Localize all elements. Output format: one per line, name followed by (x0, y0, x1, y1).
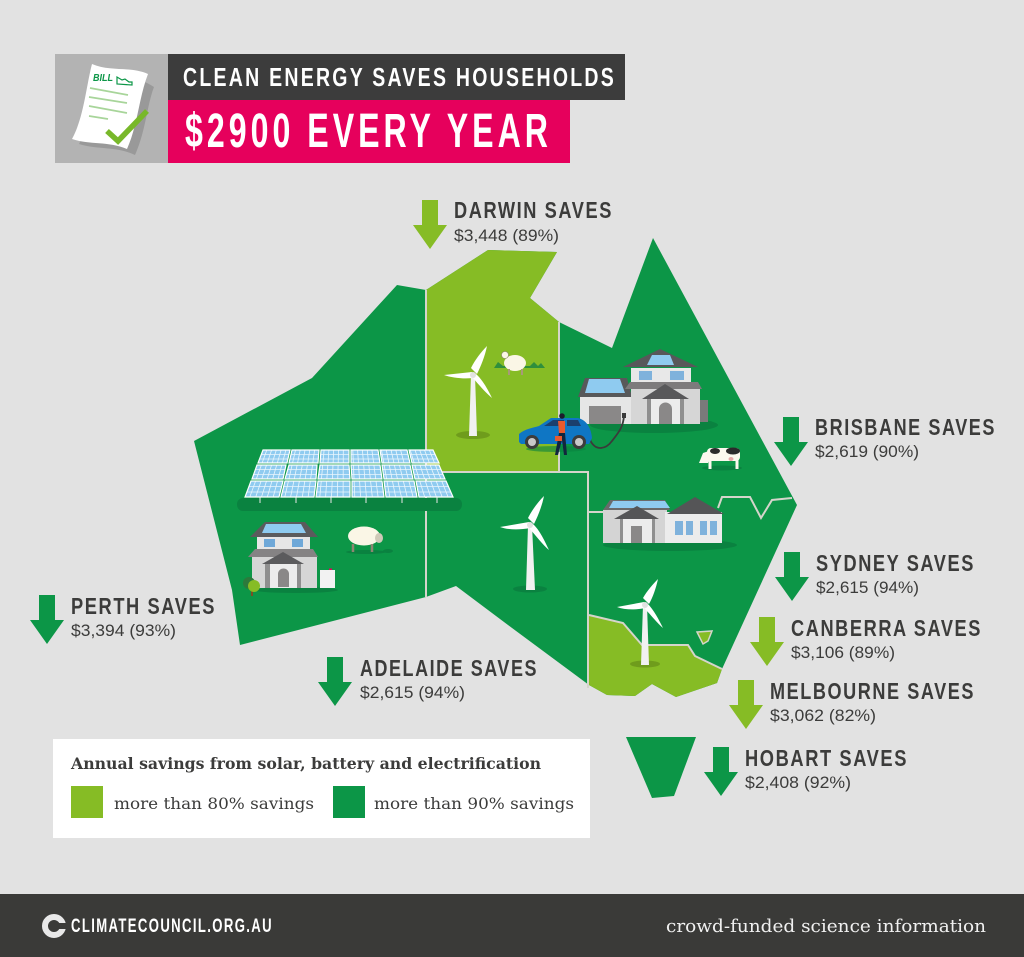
title banner (55, 54, 625, 163)
arrow (750, 617, 784, 666)
arrow (318, 657, 352, 706)
wind turbine: Victoria (617, 579, 663, 668)
city: Sydney (775, 550, 975, 601)
city: Canberra: $3,106 (89%) (791, 643, 895, 662)
sheep: Northern Territory (494, 352, 545, 375)
city: Sydney: SYDNEY SAVES (816, 550, 975, 576)
icon: tree (243, 577, 260, 596)
electric car with charging cable and person (519, 413, 626, 455)
arrow (413, 200, 447, 249)
city: Darwin (413, 197, 613, 249)
Tasmania (626, 737, 696, 798)
wind turbine: South Australia (500, 496, 549, 592)
city: Melbourne: $3,062 (82%) (770, 706, 876, 725)
Northern Territory (426, 250, 559, 471)
city: Perth: PERTH SAVES (71, 593, 216, 619)
Victoria (589, 615, 722, 697)
city: Adelaide (318, 655, 538, 706)
mainland (194, 238, 797, 697)
logo (45, 916, 273, 937)
arrow (704, 747, 738, 796)
city: Adelaide: ADELAIDE SAVES (360, 655, 538, 681)
city: Brisbane (774, 414, 996, 466)
legend (53, 739, 590, 838)
heading line 1: CLEAN ENERGY SAVES HOUSEHOLDS (183, 62, 616, 92)
city: Perth (30, 593, 216, 644)
house: Perth with battery (243, 522, 338, 596)
arrow (774, 417, 808, 466)
city: Hobart (704, 745, 908, 796)
cow (699, 448, 742, 470)
arrow (30, 595, 64, 644)
heading line 2: $2900 EVERY YEAR (185, 105, 552, 158)
Australian Capital Territory (697, 631, 712, 644)
city: Adelaide: $2,615 (94%) (360, 683, 465, 702)
city: Darwin: DARWIN SAVES (454, 197, 613, 223)
arrow (729, 680, 763, 729)
legend item: 90%: more than 90% savings (374, 794, 574, 813)
legend item: 80%: more than 80% savings (114, 794, 314, 813)
city: Sydney: $2,615 (94%) (816, 578, 919, 597)
city: Melbourne (729, 678, 975, 729)
arrow (775, 552, 809, 601)
city: Canberra (750, 615, 982, 666)
city: Perth: $3,394 (93%) (71, 621, 176, 640)
city: Darwin: $3,448 (89%) (454, 226, 559, 245)
city: Melbourne: MELBOURNE SAVES (770, 678, 975, 704)
footer (0, 894, 1024, 957)
icon: bill with check mark: BILL (93, 73, 113, 84)
sheep: Western Australia (346, 526, 393, 554)
map of Australia (194, 238, 797, 798)
house: Brisbane with garage (578, 349, 718, 433)
wind turbine: Northern Territory (444, 346, 492, 439)
house: Sydney (603, 497, 737, 551)
legend title: Annual savings from solar, battery and electrification (70, 754, 541, 773)
city: Brisbane: $2,619 (90%) (815, 442, 919, 461)
legend item: 90% (333, 786, 574, 818)
solar farm (237, 448, 462, 511)
tagline: crowd-funded science information (666, 916, 986, 937)
logo: CLIMATECOUNCIL.ORG.AU (71, 916, 273, 937)
person (555, 413, 567, 455)
icon: bill with check mark (72, 64, 154, 155)
legend item: 80% (71, 786, 314, 818)
state borders (426, 290, 792, 688)
city: Hobart: HOBART SAVES (745, 745, 908, 771)
city: Hobart: $2,408 (92%) (745, 773, 851, 792)
